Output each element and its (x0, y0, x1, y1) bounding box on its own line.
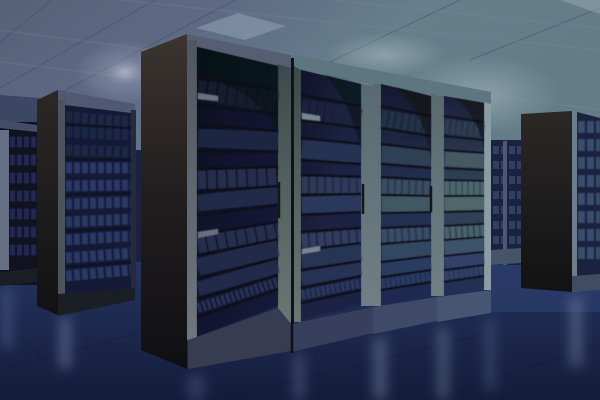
door frames (187, 40, 197, 340)
rack side (521, 111, 572, 292)
ceiling (0, 0, 600, 150)
door handles (279, 182, 431, 218)
rack door modules (66, 117, 131, 276)
panel: cabinet D (444, 96, 484, 296)
floor (0, 262, 600, 400)
rack door frame (572, 111, 577, 292)
server rack: left (37, 90, 136, 316)
panel: cabinet B (301, 70, 361, 320)
rack door modules (577, 112, 600, 276)
rack top cap (58, 90, 135, 114)
far server rack row (491, 140, 521, 265)
rack plinth (58, 288, 135, 316)
top cap (187, 34, 491, 104)
back wall (0, 95, 40, 125)
plinth (188, 308, 291, 369)
server rack: right (521, 111, 600, 292)
server rack: far left (0, 120, 37, 286)
server rack bank: four cabinets (141, 34, 491, 369)
rack side (37, 90, 58, 315)
rack side (141, 34, 187, 369)
panel: cabinet C (381, 84, 431, 306)
panel: cabinet A (197, 47, 278, 337)
rack door frame (58, 100, 65, 315)
rack plinth (572, 274, 600, 292)
